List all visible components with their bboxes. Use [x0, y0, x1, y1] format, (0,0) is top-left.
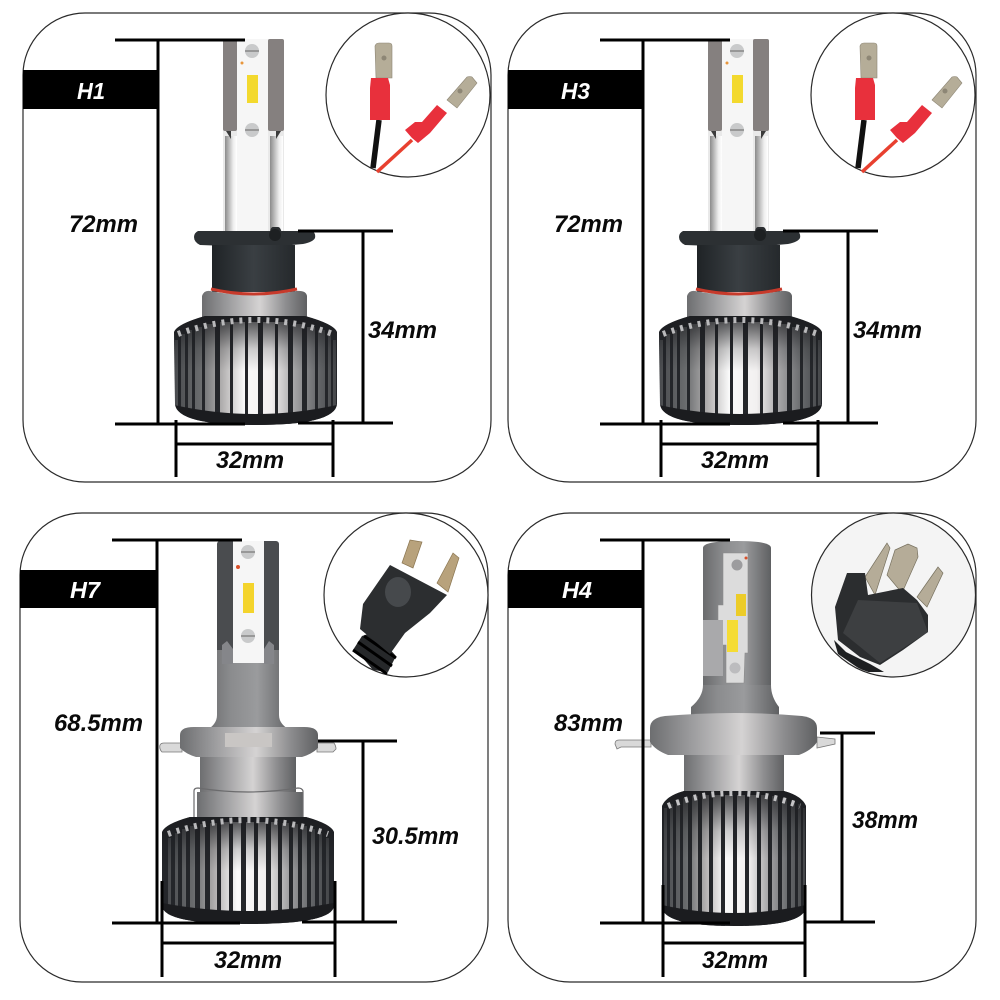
dimension: 30.5mm base height: 30.5mm	[372, 823, 459, 850]
dimension: 32mm width: 32mm	[214, 947, 282, 974]
label: H3: H3	[561, 78, 590, 104]
bulb: H1	[174, 39, 337, 427]
dimension: 32mm width: 32mm	[702, 947, 768, 974]
bulb: H7	[160, 541, 336, 925]
dimension: 72mm height	[69, 40, 245, 424]
dimension: 38mm base height	[805, 733, 918, 922]
bulb: H4	[615, 541, 835, 927]
label: H1	[23, 70, 157, 109]
dimension: 72mm height	[554, 40, 730, 424]
dimension: 32mm width	[663, 885, 805, 977]
inset: H7 plug	[324, 513, 488, 677]
label: H7: H7	[70, 577, 101, 603]
dimension: 30.5mm base height	[302, 741, 459, 922]
dimension: 34mm base height	[298, 231, 437, 423]
dimension: 32mm width: 32mm	[216, 447, 284, 474]
dimension: 32mm width: 32mm	[701, 447, 769, 474]
dimension: 32mm width	[176, 420, 333, 477]
dimension: 72mm height: 72mm	[69, 211, 138, 238]
dimension: 68.5mm height: 68.5mm	[54, 710, 143, 737]
label: H3	[508, 70, 642, 109]
label: H4	[508, 570, 642, 608]
dimension: 32mm width	[661, 420, 818, 477]
label: H7	[20, 570, 156, 608]
label: H1: H1	[77, 78, 105, 104]
panel: H7 bulb dimensions	[20, 513, 488, 982]
inset: H1 wire connectors	[326, 13, 490, 177]
dimension: 83mm height	[554, 540, 730, 923]
bulb: H3	[659, 39, 822, 427]
dimension: 34mm base height: 34mm	[853, 317, 922, 344]
dimension: 83mm height: 83mm	[554, 710, 623, 737]
dimension: 68.5mm height	[54, 540, 242, 923]
inset: H3 wire connectors	[811, 13, 975, 177]
dimension: 32mm width	[162, 881, 335, 977]
dimension: 34mm base height	[783, 231, 922, 423]
inset: H4 plug	[812, 513, 976, 677]
dimension: 38mm base height: 38mm	[852, 807, 918, 834]
panel: H4 bulb dimensions	[508, 513, 976, 982]
dimension: 34mm base height: 34mm	[368, 317, 437, 344]
label: H4: H4	[562, 577, 592, 603]
panel: H3 bulb dimensions	[508, 13, 976, 482]
dimension: 72mm height: 72mm	[554, 211, 623, 238]
panel: H1 bulb dimensions	[23, 13, 491, 482]
